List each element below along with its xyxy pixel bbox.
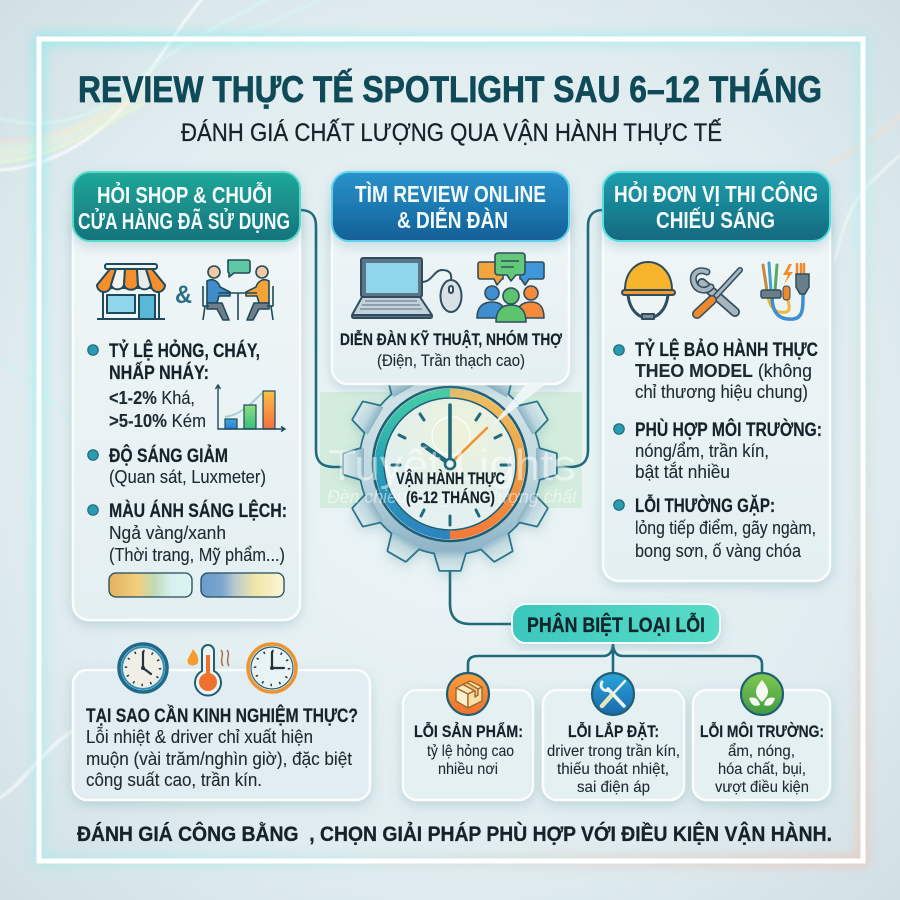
panel text: công suất cao, trần kín. [86, 770, 262, 790]
panel text: TẠI SAO CẦN KINH NGHIỆM THỰC? [86, 705, 358, 727]
panel header: HỎI ĐƠN VỊ THI CÔNG [614, 179, 818, 207]
card text: LỖI SẢN PHẨM: [414, 722, 523, 741]
panel text: Lỗi nhiệt & driver chỉ xuất hiện [86, 726, 313, 747]
card text: sai điện áp [577, 779, 650, 796]
bullet: color shift: Ngả vàng/xanh [109, 523, 226, 543]
icon: leaves [741, 673, 783, 715]
icon: tools [592, 673, 634, 715]
bullet: brightness drop: ĐỘ SÁNG GIẢM [109, 445, 228, 467]
panel text [340, 329, 562, 370]
bullet: common faults: LỖI THƯỜNG GẶP: [635, 495, 775, 517]
icon: electrical cables [761, 263, 809, 319]
bullet: warranty rate: TỶ LỆ BẢO HÀNH THỰC [635, 339, 818, 361]
bullet: brightness drop: (Quan sát, Luxmeter) [109, 467, 266, 487]
panel header [332, 172, 569, 241]
watermark text: Tuyết Lights [328, 441, 576, 490]
ampersand: & [175, 281, 192, 309]
icon: store [97, 264, 165, 319]
card: installation faults [543, 673, 684, 800]
tree connectors [468, 643, 762, 672]
bullet: warranty rate: THEO MODEL (không [635, 361, 812, 381]
panel: shop and store chains [73, 172, 300, 620]
icon: clock two [248, 644, 296, 692]
panel body [332, 205, 569, 384]
bullet: common faults: bong sơn, ố vàng chóa [635, 541, 802, 561]
icon: thermometer [188, 645, 229, 696]
panel body [73, 670, 370, 800]
card text: LỖI LẮP ĐẶT: [568, 722, 659, 741]
bullet: common faults: lỏng tiếp điểm, gãy ngàm, [635, 518, 816, 538]
card text: LỖI MÔI TRƯỜNG: [700, 722, 824, 741]
badge: error types [512, 604, 720, 643]
panel header: CỬA HÀNG ĐÃ SỬ DỤNG [78, 206, 290, 234]
bullet: environment fit: PHÙ HỢP MÔI TRƯỜNG: [635, 419, 822, 441]
connectors from side panels to gear [300, 210, 603, 624]
card: environment faults [693, 673, 830, 800]
clock hands [423, 405, 487, 469]
clock label [396, 469, 505, 507]
bar chart icon [216, 385, 285, 432]
gear and clock [344, 358, 556, 570]
panel: online reviews and forums [332, 172, 569, 428]
panel body [603, 205, 830, 581]
bullet: common faults [614, 495, 816, 561]
bullet: environment fit [614, 419, 822, 482]
card: product faults [403, 673, 533, 800]
card text: tỷ lệ hỏng cao [427, 743, 514, 760]
bullet: failure rate: <1-2% Khá, [109, 388, 195, 408]
panel: lighting installers [603, 172, 830, 581]
badge: error types: PHÂN BIỆT LOẠI LỖI [527, 613, 705, 637]
gear [344, 358, 556, 570]
bullet: warranty rate [614, 339, 818, 402]
bullet: failure rate: NHẤP NHÁY: [109, 362, 209, 384]
card text: driver trong trần kín, [547, 743, 680, 760]
bullet: failure rate: TỶ LỆ HỎNG, CHÁY, [109, 340, 260, 362]
icon: wrench and screwdriver [693, 270, 740, 314]
panel text: muộn (vài trăm/nghìn giờ), đặc biệt [86, 749, 352, 769]
clock face [373, 387, 527, 541]
panel header [603, 172, 830, 241]
bullet: color shift [88, 500, 287, 565]
bullet: failure rate: >5-10% Kém [109, 411, 206, 431]
bullet: color shift: (Thời trang, Mỹ phẩm...) [109, 545, 285, 565]
bullet: environment fit: bật tắt nhiều [635, 461, 730, 482]
panel: why real experience [73, 644, 370, 800]
panel header [73, 172, 300, 241]
clock label: (6-12 THÁNG) [406, 488, 495, 507]
icon: laptop and mouse [352, 258, 462, 318]
watermark text: Đèn chiếu sáng chất lượng chất [327, 487, 578, 507]
clock label: VẬN HÀNH THỰC [396, 469, 505, 488]
panel body [73, 205, 300, 620]
bullet: failure rate [88, 340, 260, 431]
bullet list [614, 339, 822, 561]
icon: people at table [203, 260, 273, 320]
panel header: HỎI SHOP & CHUỖI [97, 180, 272, 208]
panel header: CHIẾU SÁNG [656, 206, 775, 233]
panel text: DIỄN ĐÀN KỸ THUẬT, NHÓM THỢ [340, 329, 562, 349]
icon: discussion group [477, 253, 544, 322]
bullet: brightness drop [88, 445, 266, 487]
card text: ẩm, nóng, [728, 742, 795, 760]
card text [414, 722, 523, 778]
icon: box [447, 673, 489, 715]
card text: nhiều nơi [438, 761, 498, 778]
bullet list [88, 340, 287, 597]
card text [700, 722, 824, 796]
bullet: environment fit: nóng/ẩm, trần kín, [635, 441, 769, 461]
callout tail [490, 383, 547, 428]
panel text: (Điện, Trần thạch cao) [377, 352, 525, 370]
card text: hóa chất, bụi, [718, 761, 806, 778]
color swatches [109, 573, 284, 597]
bullet: warranty rate: chỉ thương hiệu chung) [635, 382, 808, 402]
footer statement: ĐÁNH GIÁ CÔNG BẰNG , CHỌN GIẢI PHÁP PHÙ HỢP VỚI ĐIỀU KIỆN VẬN HÀNH. [77, 822, 832, 846]
card text: vượt điều kiện [715, 779, 809, 796]
panel header: & DIỄN ĐÀN [397, 205, 508, 233]
card text [547, 722, 680, 796]
icon: hard hat [622, 262, 675, 319]
subtitle: ĐÁNH GIÁ CHẤT LƯỢNG QUA VẬN HÀNH THỰC TẾ [181, 118, 722, 147]
panel header: TÌM REVIEW ONLINE [355, 180, 546, 207]
card text: thiếu thoát nhiệt, [557, 761, 669, 778]
bullet: color shift: MÀU ÁNH SÁNG LỆCH: [109, 500, 287, 522]
panel text [86, 705, 358, 790]
icon: clock one [119, 644, 167, 692]
watermark panel [320, 392, 582, 508]
